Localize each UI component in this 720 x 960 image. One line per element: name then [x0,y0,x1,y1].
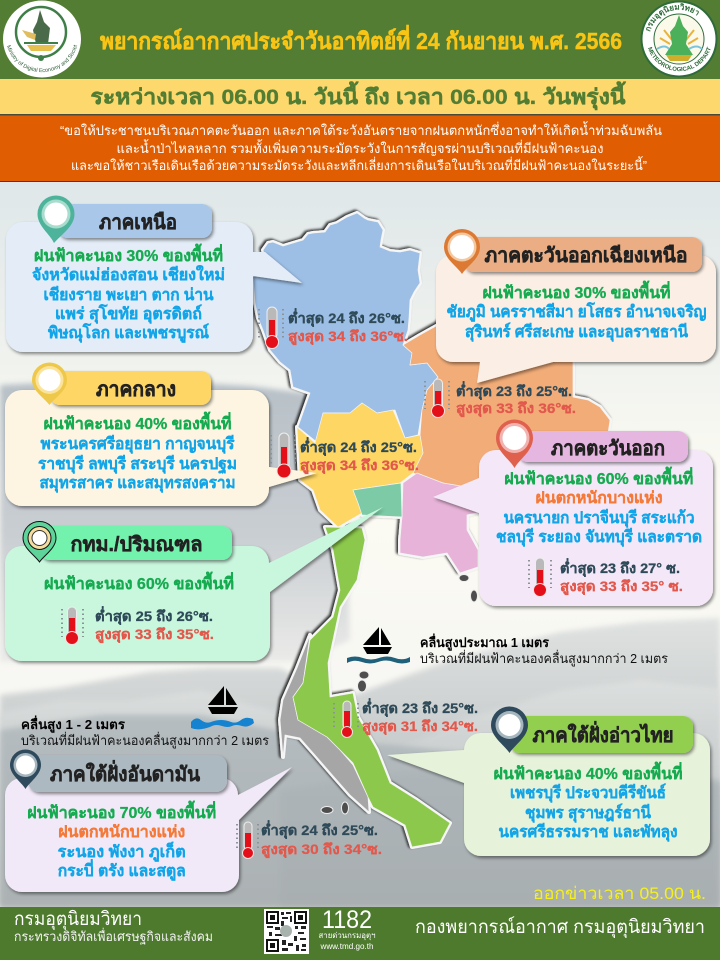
panel: north: เชียงราย พะเยา ตาก น่าน [44,285,214,304]
region: bangkok and vicinity [353,483,402,517]
panel: northeast [436,229,716,383]
issue time: ออกข่าวเวลา 05.00 น. [533,884,706,903]
temperature: bangkok: สูงสุด 33 ถึง 35°ซ. [95,626,214,643]
title: พยากรณ์อากาศประจำวันอาทิตย์ที่ 24 กันยายน พ.ศ. 2566 [100,24,622,54]
footer: department name [14,909,213,945]
hotline: สายด่วนกรมอุตุฯ [318,931,376,940]
temperature: south andaman coast: สูงสุด 30 ถึง 34°ซ. [261,841,382,858]
panel: central [5,362,317,506]
pin: northeast [444,229,480,274]
header: north [58,204,212,238]
panel: east: ฝนฟ้าคะนอง 60% ของพื้นที่ [504,466,693,488]
panel: bangkok and vicinity: กทม./ปริมณฑล [70,534,202,556]
panel: central: ฝนฟ้าคะนอง 40% ของพื้นที่ [44,411,232,433]
thermometer: east [529,558,551,596]
panel: south gulf coast: ฝนฟ้าคะนอง 40% ของพื้นที่ [494,761,682,783]
wave note: gulf: บริเวณที่มีฝนฟ้าคะนองคลื่นสูงมากกว่า 2 เมตร [420,650,668,667]
pin: south andaman coast [10,750,41,789]
temperature: central: สูงสุด 34 ถึง 36°ซ. [300,457,419,474]
panel: east [433,420,713,606]
panel: south andaman coast [5,750,292,892]
temperature: south andaman coast: ต่ำสุด 24 ถึง 25°ซ. [261,820,378,839]
temperature: north: สูงสุด 34 ถึง 36°ซ. [288,328,408,345]
panel: central: ภาคกลาง [96,379,176,401]
temperature: south gulf coast: สูงสุด 31 ถึง 34°ซ. [362,718,478,735]
wave note: gulf [420,633,668,667]
warning banner: “ขอให้ประชาชนบริเวณภาคตะวันออก และภาคใต้ระวังอันตรายจากฝนตกหนักซึ่งอาจทำให้เกิดน้ำท่วมฉับพลัน [60,121,662,138]
panel: south gulf coast [387,706,710,856]
panel: south gulf coast: เพชรบุรี ประจวบคีรีขันธ์ [510,783,666,803]
time period bar: ระหว่างเวลา 06.00 น. วันนี้ ถึง เวลา 06.00 น. วันพรุ่งนี้ [90,81,627,111]
thermometer: central [271,433,295,478]
region: north [253,213,438,443]
panel: northeast: ฝนฟ้าคะนอง 30% ของพื้นที่ [482,280,670,302]
panel: northeast: ภาคตะวันออกเฉียงเหนือ [484,244,688,267]
region: south gulf coast [293,527,450,847]
panel: north: จังหวัดแม่ฮ่องสอน เชียงใหม่ [32,265,225,284]
wave note: andaman: บริเวณที่มีฝนฟ้าคะนองคลื่นสูงมากกว่า 2 เมตร [21,732,269,749]
panel: south andaman coast: ระนอง พังงา ภูเก็ต [58,840,186,863]
temperature: bangkok: ต่ำสุด 25 ถึง 26°ซ. [95,606,213,625]
temperature: south andaman coast [261,820,382,858]
temperature: north [288,308,408,345]
panel: south andaman coast: ฝนตกหนักบางแห่ง [58,823,185,841]
panel: northeast: สุรินทร์ ศรีสะเกษ และอุบลราชธานี [465,322,688,342]
thermometer: north [259,307,283,348]
temperature: south gulf coast [362,698,478,735]
thermometer: south andaman coast [237,822,258,858]
hotline [318,906,376,951]
thermometer: south gulf coast [334,701,358,738]
panel: south gulf coast: นครศรีธรรมราช และพัทลุง [498,822,678,842]
footer bar [0,907,720,960]
icon: boat with teal waves [347,627,410,664]
islands [321,574,478,814]
header: bangkok [40,526,232,560]
temperature: northeast: สูงสุด 33 ถึง 36°ซ. [456,400,576,417]
panel: south andaman coast: ภาคใต้ฝั่งอันดามัน [50,759,200,786]
icon: boat with blue waves [191,686,254,729]
temperature: east: สูงสุด 33 ถึง 35° ซ. [560,578,683,595]
panel: central: ราชบุรี ลพบุรี สระบุรี นครปฐม [38,454,237,474]
panel: central: พระนครศรีอยุธยา กาญจนบุรี [40,434,235,454]
background: misty mountains [0,181,720,908]
header: northeast [464,237,702,272]
panel: south gulf coast: ภาคใต้ฝั่งอ่าวไทย [532,720,674,747]
footer: department name: กรมอุตุนิยมวิทยา [14,909,142,931]
panel: south andaman coast: กระบี่ ตรัง และสตูล [58,859,186,882]
wave note: andaman: คลื่นสูง 1 - 2 เมตร [21,715,125,733]
header: east [518,431,688,462]
region: east [400,473,490,573]
temperature: central: ต่ำสุด 24 ถึง 25°ซ. [300,437,417,456]
warning banner [0,116,720,182]
temperature: northeast [456,381,576,417]
panel: central: สมุทรสาคร และสมุทรสงคราม [40,475,236,493]
temperature: bangkok [95,606,214,643]
header: south andaman coast [28,755,227,792]
panel: north: ภาคเหนือ [99,211,177,234]
wave note: andaman [21,715,269,749]
region: south andaman coast [280,635,369,812]
panel: bangkok and vicinity: ฝนฟ้าคะนอง 60% ของพื้นที่ [44,571,234,593]
panel: south gulf coast: ชุมพร สุราษฎร์ธานี [525,803,651,823]
wave note: gulf: คลื่นสูงประมาณ 1 เมตร [420,633,549,651]
panel: east: นครนายก ปราจีนบุรี สระแก้ว [504,508,695,528]
temperature: central [300,437,419,474]
thermometer: northeast [425,379,449,418]
pin: central [32,362,67,405]
header bar [0,0,720,79]
warning banner: และน้ำป่าไหลหลาก รวมทั้งเพิ่มความระมัดระวังในการสัญจรผ่านบริเวณที่มีฝนฟ้าคะนอง [116,139,604,156]
temperature: east [560,558,683,595]
panel: north: แพร่ สุโขทัย อุตรดิตถ์ [55,303,202,324]
header: south gulf coast [510,716,693,753]
region: northeast [403,300,610,487]
temperature: east: ต่ำสุด 23 ถึง 27° ซ. [560,558,680,577]
QR code [264,909,309,954]
region: central [297,403,423,527]
logo: meteorological department: กรมอุตุนิยมวิทยา [646,3,699,32]
panel: north [6,196,302,352]
footer: department name: กระทรวงดิจิทัลเพื่อเศรษฐกิจและสังคม [14,928,213,945]
hotline: www.tmd.go.th [319,942,374,951]
header: central [50,371,211,405]
pin: south gulf coast [491,706,528,753]
time period bar [0,79,720,116]
panel: east: ฝนตกหนักบางแห่ง [536,489,662,507]
temperature: north: ต่ำสุด 24 ถึง 26°ซ. [288,308,405,327]
warning banner: และขอให้ชาวเรือเดินเรือด้วยความระมัดระวังและหลีกเลี่ยงการเดินเรือในบริเวณที่มีฝนฟ้าคะนองในระยะนี้” [71,156,647,173]
thermometer: bangkok [62,607,83,644]
footer: forecast bureau: กองพยากรณ์อากาศ กรมอุตุนิยมวิทยา [415,916,705,939]
panel: north: ฝนฟ้าคะนอง 30% ของพื้นที่ [34,243,223,265]
panel: northeast: ชัยภูมิ นครราชสีมา ยโสธร อำนาจเจริญ [446,301,706,323]
panel: east: ภาคตะวันออก [551,438,665,460]
hotline: 1182 [322,906,372,934]
panel: south andaman coast: ฝนฟ้าคะนอง 70% ของพื้นที่ [27,800,216,822]
panel: north: พิษณุโลก และเพชรบูรณ์ [48,322,209,344]
logo: meteorological department [640,0,718,78]
panel: bangkok and vicinity [5,507,383,661]
panel: east: ชลบุรี ระยอง จันทบุรี และตราด [496,527,702,547]
temperature: northeast: ต่ำสุด 23 ถึง 25°ซ. [456,381,572,400]
pin: bangkok [23,522,56,562]
temperature: south gulf coast: ต่ำสุด 23 ถึง 25°ซ. [362,698,478,717]
pin: east [496,420,533,468]
map of Thailand [253,213,610,847]
pin: north [38,196,74,243]
